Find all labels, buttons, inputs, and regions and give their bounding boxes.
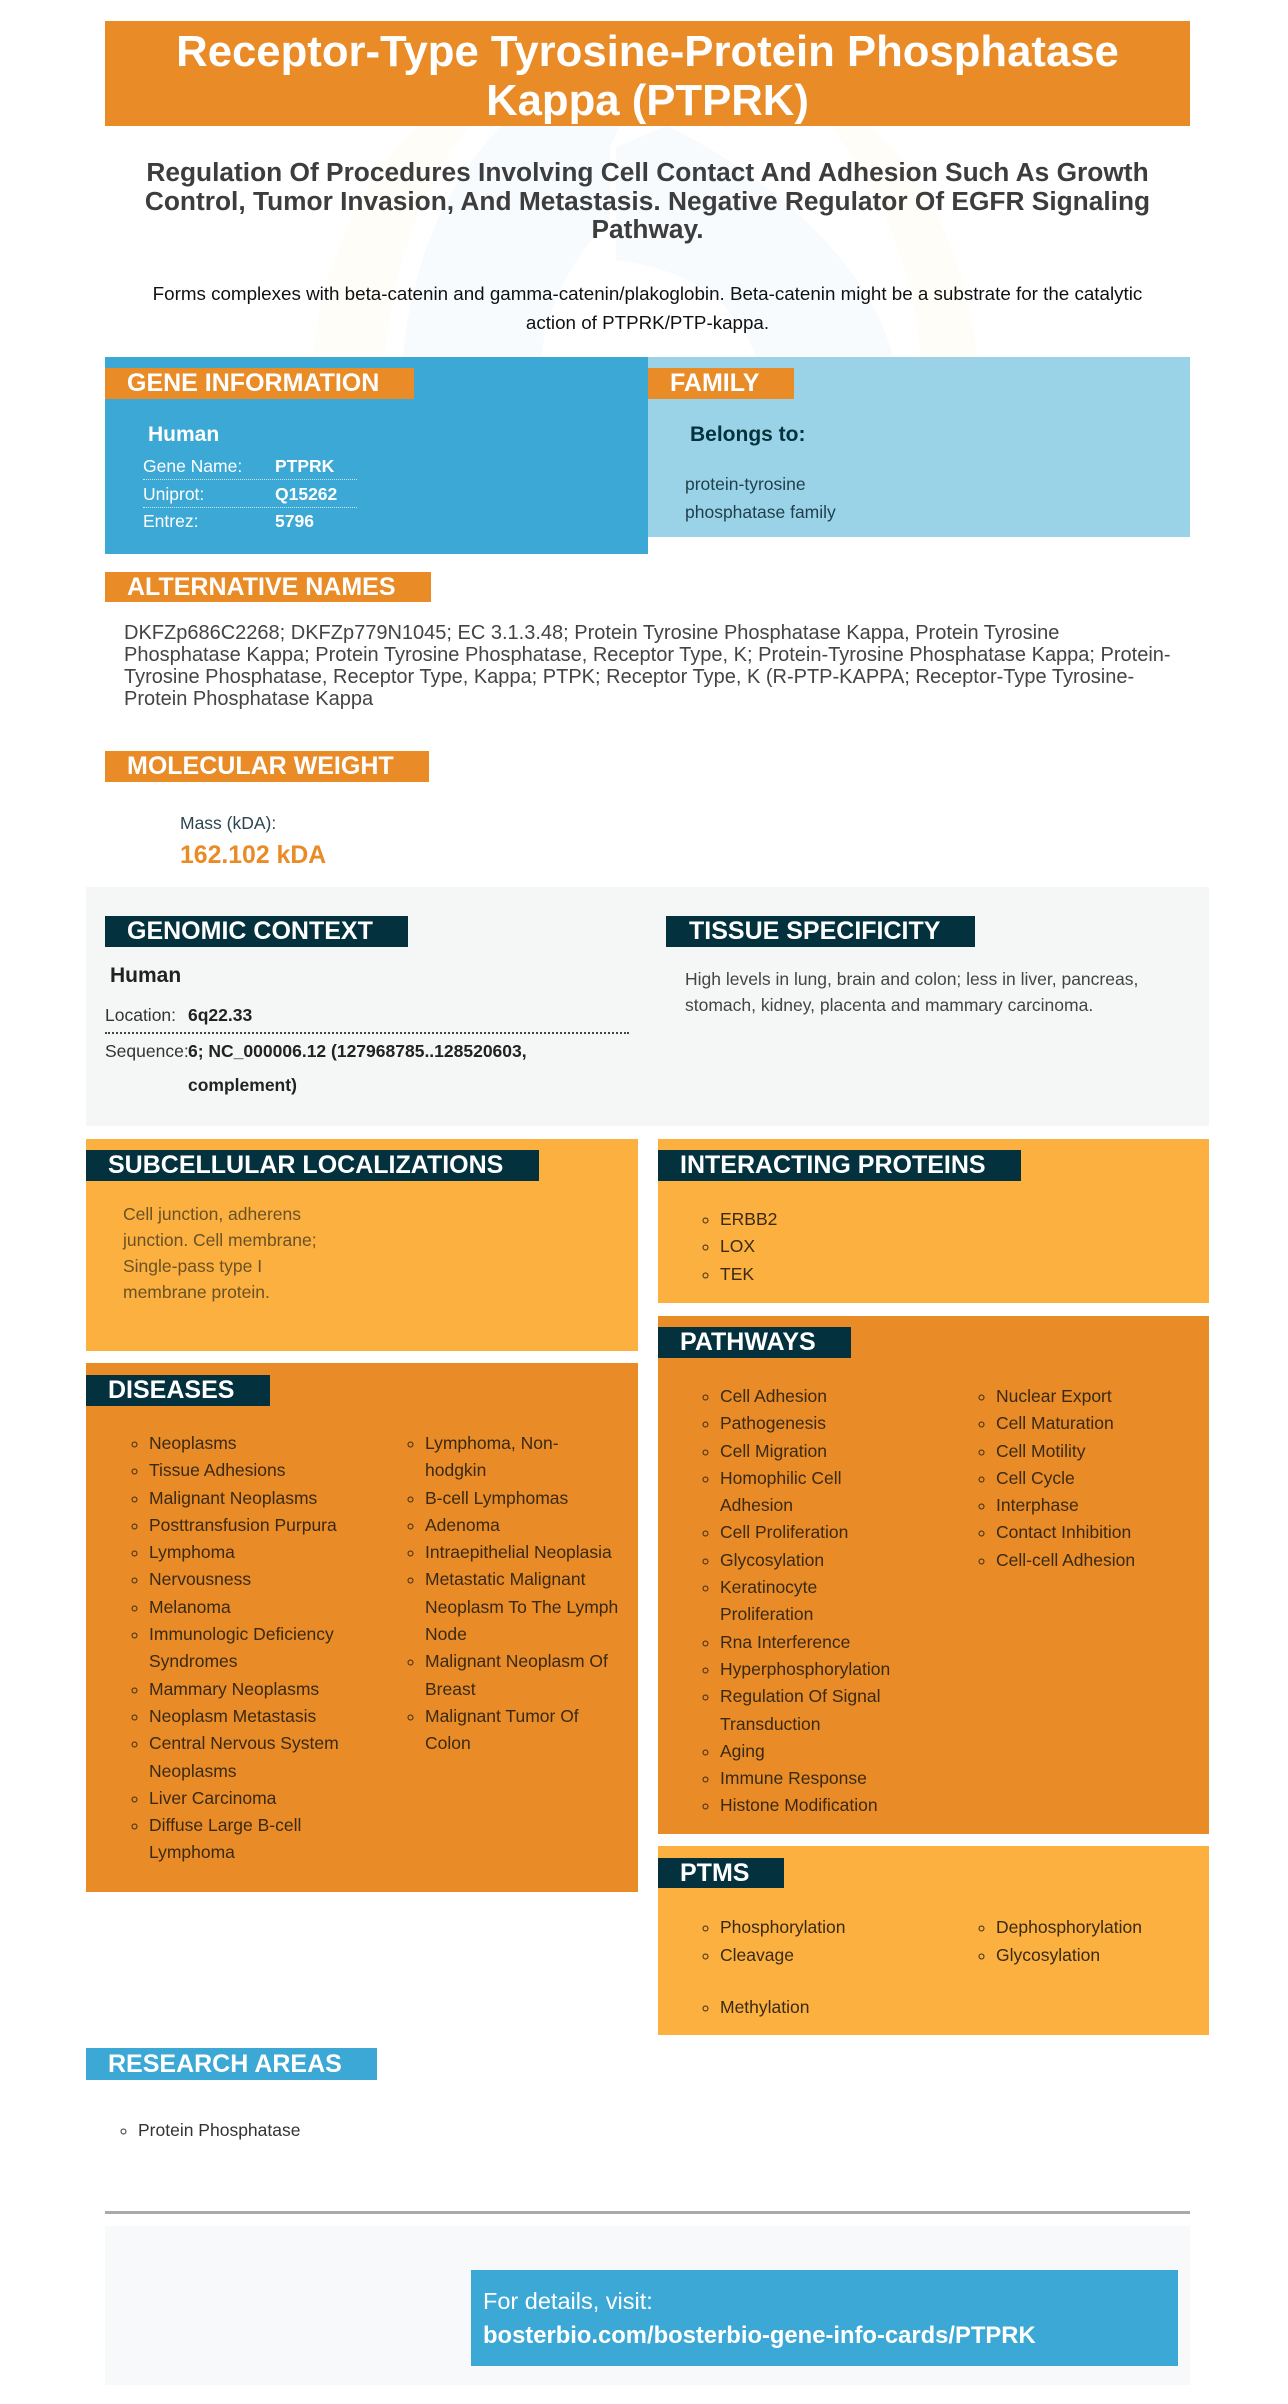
footer panel xyxy=(105,2226,1190,2385)
mass value: 162.102 kDA xyxy=(180,842,326,869)
panel: subcellular localizations xyxy=(86,1139,638,1351)
entrez row: 5796 xyxy=(275,511,314,531)
sequence row: Sequence: xyxy=(105,1041,189,1061)
pathways list column 1: Aging xyxy=(720,1741,765,1761)
diseases list column 2: Node xyxy=(425,1624,467,1644)
diseases list column 2: Colon xyxy=(425,1733,471,1753)
entrez row xyxy=(143,511,314,531)
family text xyxy=(685,474,836,522)
localization text: Cell junction, adherens xyxy=(123,1204,301,1224)
location row: 6q22.33 xyxy=(188,1005,252,1025)
pathways list column 2: Cell Cycle xyxy=(996,1468,1075,1488)
panel: genomic context and tissue specificity xyxy=(86,887,1209,1126)
subtitle: Regulation Of Procedures Involving Cell Contact And Adhesion Such As Growth xyxy=(146,157,1149,187)
diseases list column 1 xyxy=(132,1433,339,1862)
heading: PTMs xyxy=(658,1858,784,1888)
pathways list column 1: Histone Modification xyxy=(720,1795,878,1815)
diseases list column 2: Malignant Neoplasm Of xyxy=(425,1651,608,1671)
tissue specificity text xyxy=(685,969,1138,1015)
pathways list column 1: Proliferation xyxy=(720,1604,813,1624)
location row xyxy=(105,1002,629,1034)
summary text: action of PTPRK/PTP-kappa. xyxy=(526,312,769,333)
pathways list column 2: Cell Motility xyxy=(996,1441,1085,1461)
pathways list column 1: Pathogenesis xyxy=(720,1413,826,1433)
diseases list column 2: Lymphoma, Non- xyxy=(425,1433,559,1453)
pathways list column 1 xyxy=(702,1386,890,1815)
alternative names text: Tyrosine Phosphatase, Receptor Type, Kappa; PTPK; Receptor Type, K (R-PTP-KAPPA; Receptor-Type Tyrosine- xyxy=(124,666,1134,688)
mass label: Mass (kDA): xyxy=(180,813,276,833)
pathways list column 2: Cell-cell Adhesion xyxy=(996,1550,1135,1570)
summary text: Forms complexes with beta-catenin and gamma-catenin/plakoglobin. Beta-catenin might be a substrate for the catalytic xyxy=(153,283,1142,304)
PTMs list column 2 xyxy=(978,1917,1142,1965)
family text: protein-tyrosine xyxy=(685,474,806,494)
diseases list column 2: Adenoma xyxy=(425,1515,500,1535)
diseases list column 1: Mammary Neoplasms xyxy=(149,1679,319,1699)
species label: Human xyxy=(148,423,219,446)
heading: interacting proteins: INTERACTING PROTEINS xyxy=(680,1151,986,1179)
heading: molecular weight: MOLECULAR WEIGHT xyxy=(127,752,394,780)
uniprot row: Q15262 xyxy=(275,484,337,504)
pathways list column 2: Cell Maturation xyxy=(996,1413,1114,1433)
panel: interacting proteins xyxy=(658,1139,1209,1303)
diseases list column 2: Neoplasm To The Lymph xyxy=(425,1597,618,1617)
heading: pathways: PATHWAYS xyxy=(680,1328,816,1356)
sequence row: complement) xyxy=(188,1075,297,1095)
PTMs list column 1 xyxy=(702,1917,846,2017)
localization text: Single-pass type I xyxy=(123,1256,262,1276)
pathways list column 1: Rna Interference xyxy=(720,1632,850,1652)
callout url: bosterbio.com/bosterbio-gene-info-cards/PTPRK xyxy=(483,2322,1036,2349)
diseases list column 1: Tissue Adhesions xyxy=(149,1460,286,1480)
heading: gene information: GENE INFORMATION xyxy=(127,369,379,397)
pathways list column 1: Cell Migration xyxy=(720,1441,827,1461)
pathways list column 2: Interphase xyxy=(996,1495,1079,1515)
panel: diseases xyxy=(86,1363,638,1892)
diseases list column 1: Lymphoma xyxy=(149,1842,235,1862)
location row: Location: xyxy=(105,1005,176,1025)
background watermark logo xyxy=(0,0,1288,400)
subtitle: Control, Tumor Invasion, And Metastasis. Negative Regulator Of EGFR Signaling xyxy=(145,186,1150,216)
species label: Human xyxy=(110,964,181,987)
localization text: membrane protein. xyxy=(123,1282,270,1302)
title: Kappa (PTPRK) xyxy=(486,76,809,124)
localization text xyxy=(122,1204,317,1302)
pathways list column 1: Keratinocyte xyxy=(720,1577,817,1597)
heading: PTMs: PTMS xyxy=(680,1859,749,1887)
diseases list column 1: Neoplasms xyxy=(149,1761,237,1781)
diseases list column 2: Intraepithelial Neoplasia xyxy=(425,1542,612,1562)
pathways list column 1: Cell Proliferation xyxy=(720,1522,848,1542)
diseases list column 1: Melanoma xyxy=(149,1597,231,1617)
diseases list column 1: Nervousness xyxy=(149,1569,251,1589)
uniprot row: Uniprot: xyxy=(143,484,204,504)
pathways list column 1: Transduction xyxy=(720,1714,821,1734)
gene name row: Gene Name: xyxy=(143,456,242,476)
heading: subcellular localizations: SUBCELLULAR LOCALIZATIONS xyxy=(108,1151,503,1179)
diseases list column 2: B-cell Lymphomas xyxy=(425,1488,568,1508)
panel: gene information xyxy=(105,357,648,554)
heading: diseases: DISEASES xyxy=(108,1376,234,1404)
alternative names text: DKFZp686C2268; DKFZp779N1045; EC 3.1.3.48; Protein Tyrosine Phosphatase Kappa, Protein Tyrosine xyxy=(124,622,1059,644)
pathways list column 1: Regulation Of Signal xyxy=(720,1686,881,1706)
research areas list: Protein Phosphatase xyxy=(138,2120,300,2140)
family text: phosphatase family xyxy=(685,502,836,522)
pathways list column 1: Adhesion xyxy=(720,1495,793,1515)
diseases list column 1: Central Nervous System xyxy=(149,1733,339,1753)
pathways list column 1: Cell Adhesion xyxy=(720,1386,827,1406)
diseases list column 1: Neoplasm Metastasis xyxy=(149,1706,316,1726)
pathways list column 1: Homophilic Cell xyxy=(720,1468,842,1488)
heading: family xyxy=(648,368,794,399)
heading: research areas: RESEARCH AREAS xyxy=(108,2050,342,2078)
callout label: For details, visit: xyxy=(483,2288,653,2314)
pathways list column 1: Hyperphosphorylation xyxy=(720,1659,890,1679)
sequence row: 6; NC_000006.12 (127968785..128520603, xyxy=(188,1041,527,1061)
pathways list column 2 xyxy=(978,1386,1135,1570)
heading: tissue specificity: TISSUE SPECIFICITY xyxy=(689,917,940,945)
alternative names text: Phosphatase Kappa; Protein Tyrosine Phosphatase, Receptor Type, K; Protein-Tyrosine Phosphatase Kappa; Protein- xyxy=(124,644,1171,666)
protein list xyxy=(702,1209,777,1284)
alternative names text xyxy=(124,622,1171,710)
protein list: ERBB2 xyxy=(720,1209,777,1229)
subtitle: Pathway. xyxy=(591,214,704,244)
heading: pathways xyxy=(658,1327,851,1358)
alternative names text: Protein Phosphatase Kappa xyxy=(124,688,373,710)
title: Receptor-Type Tyrosine-Protein Phosphatase xyxy=(176,27,1119,76)
diseases list column 2: Breast xyxy=(425,1679,476,1699)
pathways list column 1: Glycosylation xyxy=(720,1550,824,1570)
callout: details link xyxy=(471,2270,1178,2366)
title xyxy=(105,21,1190,126)
PTMs list column 1: Phosphorylation xyxy=(720,1917,846,1937)
tissue specificity text: High levels in lung, brain and colon; less in liver, pancreas, xyxy=(685,969,1138,989)
diseases list column 1: Malignant Neoplasms xyxy=(149,1488,317,1508)
diseases list column 2: hodgkin xyxy=(425,1460,486,1480)
diseases list column 1: Syndromes xyxy=(149,1651,238,1671)
PTMs list column 2: Dephosphorylation xyxy=(996,1917,1142,1937)
heading: alternative names: ALTERNATIVE NAMES xyxy=(127,573,396,601)
heading: diseases xyxy=(86,1375,270,1406)
PTMs list column 2: Glycosylation xyxy=(996,1945,1100,1965)
footer divider xyxy=(105,2211,1190,2214)
protein list: LOX xyxy=(720,1236,755,1256)
pathways list column 2: Contact Inhibition xyxy=(996,1522,1131,1542)
diseases list column 1: Posttransfusion Purpura xyxy=(149,1515,337,1535)
protein list: TEK xyxy=(720,1264,754,1284)
heading: family: FAMILY xyxy=(670,369,759,397)
pathways list column 2: Nuclear Export xyxy=(996,1386,1112,1406)
diseases list column 1: Immunologic Deficiency xyxy=(149,1624,334,1644)
uniprot row xyxy=(143,481,357,508)
panel: family xyxy=(648,357,1190,537)
tissue specificity text: stomach, kidney, placenta and mammary carcinoma. xyxy=(685,995,1093,1015)
diseases list column 1: Lymphoma xyxy=(149,1542,235,1562)
panel: PTMs xyxy=(658,1846,1209,2035)
diseases list column 2 xyxy=(408,1433,618,1753)
panel: pathways xyxy=(658,1316,1209,1834)
sequence row xyxy=(105,1041,527,1095)
gene name row xyxy=(143,453,357,480)
pathways list column 1: Immune Response xyxy=(720,1768,867,1788)
entrez row: Entrez: xyxy=(143,511,198,531)
belongs to label: Belongs to: xyxy=(690,423,806,446)
diseases list column 2: Malignant Tumor Of xyxy=(425,1706,579,1726)
diseases list column 2: Metastatic Malignant xyxy=(425,1569,586,1589)
subtitle xyxy=(145,157,1150,244)
gene name row: PTPRK xyxy=(275,456,334,476)
summary text xyxy=(153,283,1142,333)
diseases list column 1: Liver Carcinoma xyxy=(149,1788,276,1808)
PTMs list column 1: Cleavage xyxy=(720,1945,794,1965)
heading: genomic context: GENOMIC CONTEXT xyxy=(127,917,373,945)
diseases list column 1: Diffuse Large B-cell xyxy=(149,1815,301,1835)
localization text: junction. Cell membrane; xyxy=(123,1230,317,1250)
PTMs list column 1: Methylation xyxy=(720,1997,810,2017)
diseases list column 1: Neoplasms xyxy=(149,1433,237,1453)
